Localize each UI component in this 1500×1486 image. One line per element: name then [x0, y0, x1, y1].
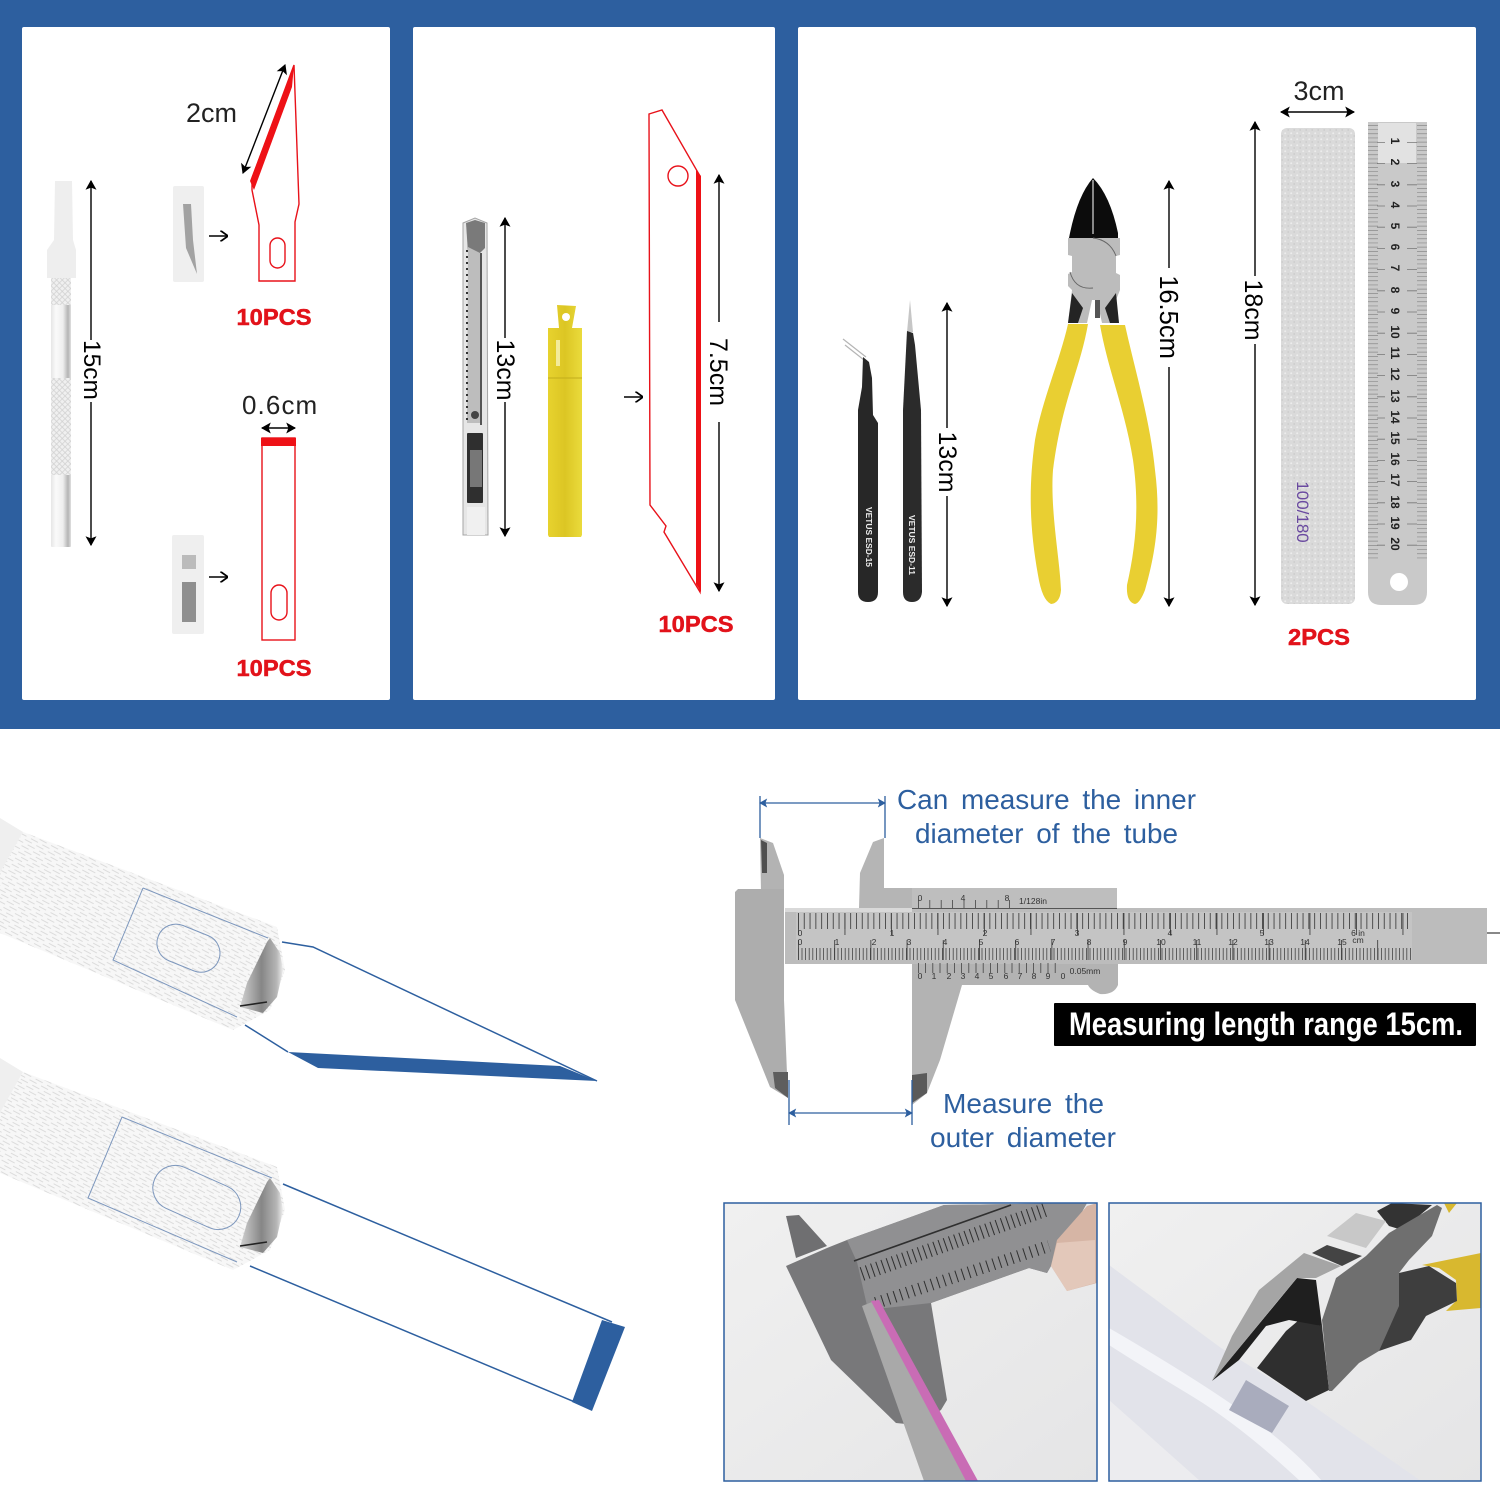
icon: steel ruler: 4 — [1388, 202, 1402, 209]
icon: steel ruler: 20 — [1388, 537, 1402, 551]
icon: straight tweezers: VETUS ESD-11 — [907, 515, 917, 575]
dimension: outer diameter — [789, 1080, 912, 1125]
illustration: vernier caliper: cm — [1352, 935, 1364, 945]
icon: steel ruler: 8 — [1388, 287, 1402, 294]
caption: inner diameter: diameter of the tube — [915, 818, 1178, 849]
illustration: vernier caliper: 0 — [798, 937, 803, 947]
illustration: vernier caliper: 3 — [961, 971, 966, 981]
dimension: 2cm — [186, 65, 285, 173]
icon: steel ruler: 10 — [1388, 325, 1402, 339]
panel: craft knife and blades — [22, 27, 390, 700]
illustration: vernier caliper: 9 — [1046, 971, 1051, 981]
quantity label: 10PCS — [236, 304, 312, 330]
icon: steel ruler: 3 — [1388, 181, 1402, 188]
dimension: 3cm — [1281, 76, 1354, 112]
dimension: 15cm: 15cm — [78, 340, 105, 400]
icon: steel ruler: 5 — [1388, 223, 1402, 230]
dimension: 7.5cm: 7.5cm — [704, 338, 732, 406]
caption: outer diameter: outer diameter — [930, 1122, 1116, 1153]
illustration: vernier caliper: 13 — [1264, 937, 1274, 947]
icon: steel ruler: 17 — [1388, 473, 1402, 487]
photo: pliers cutting tube — [1109, 1203, 1481, 1481]
icon: blade package 1 — [173, 186, 204, 282]
fixed upper jaw — [760, 838, 784, 892]
icon: steel ruler: 13 — [1388, 389, 1402, 403]
icon: steel ruler: 9 — [1388, 308, 1402, 315]
illustration: vernier caliper: 8 — [1005, 893, 1010, 903]
caption: inner diameter: Can measure the inner — [897, 784, 1196, 815]
sliding upper jaw — [859, 838, 1117, 908]
icon: sanding file — [1281, 128, 1355, 604]
illustration: vernier caliper: 6 — [1015, 937, 1020, 947]
illustration: vernier caliper: 5 — [1260, 928, 1265, 938]
icon: steel ruler: 15 — [1388, 431, 1402, 445]
dimension: 13cm: 13cm — [491, 339, 519, 401]
illustration: vernier caliper: 11 — [1193, 937, 1202, 947]
dimension: 2cm: 2cm — [186, 98, 237, 128]
panel: utility knife — [413, 27, 775, 700]
icon: steel ruler: 1 — [1388, 138, 1402, 145]
main beam — [785, 908, 1487, 964]
quantity label: 10PCS — [658, 611, 734, 637]
illustration: vernier caliper: 2 — [983, 928, 988, 938]
quantity label: 10PCS — [236, 655, 312, 681]
dimension: 18cm: 18cm — [1239, 279, 1267, 341]
illustration: vernier caliper: 6 in — [1351, 928, 1365, 938]
illustration: vernier caliper: 3 — [1075, 928, 1080, 938]
icon: steel ruler: 18 — [1388, 495, 1402, 509]
illustration: vernier caliper: 3 — [907, 937, 912, 947]
illustration: vernier caliper: 5 — [979, 937, 984, 947]
illustration: flat blade in knife handle — [0, 1058, 625, 1411]
illustration: vernier caliper — [735, 838, 1500, 1105]
fixed lower jaw — [735, 889, 788, 1098]
illustration: vernier caliper: 0 — [798, 928, 803, 938]
illustration: vernier caliper: 8 — [1087, 937, 1092, 947]
illustration: vernier caliper: 9 — [1123, 937, 1128, 947]
caption: outer diameter: Measure the — [943, 1088, 1104, 1119]
illustration: vernier caliper: 12 — [1228, 937, 1238, 947]
quantity label: 2PCS — [1288, 624, 1350, 650]
illustration: vernier caliper: 0 — [1061, 971, 1066, 981]
arrow — [209, 576, 227, 578]
blade outline: flat — [261, 438, 296, 640]
icon: bent tweezers — [843, 339, 878, 602]
illustration: vernier caliper: 0.05mm — [1070, 966, 1100, 976]
icon: craft knife handle with cap — [47, 181, 76, 547]
icon: sanding file: 100/180 — [1293, 481, 1312, 543]
illustration: vernier caliper: 1 — [835, 937, 840, 947]
illustration: vernier caliper: 4 — [1168, 928, 1173, 938]
icon: utility knife — [463, 218, 488, 535]
icon: steel ruler: 16 — [1388, 452, 1402, 466]
icon: straight tweezers — [903, 300, 922, 602]
icon: steel ruler: 14 — [1388, 410, 1402, 424]
illustration: vernier caliper: 7 — [1018, 971, 1023, 981]
sliding lower jaw — [912, 964, 1118, 1105]
caliper scales — [798, 904, 1412, 968]
illustration: vernier caliper: 5 — [989, 971, 994, 981]
illustration: vernier caliper: 1/128in — [1019, 896, 1047, 906]
illustration: vernier caliper: 4 — [961, 893, 966, 903]
icon: yellow blade pack — [548, 305, 582, 537]
blue header band — [0, 0, 1500, 729]
icon: steel ruler: 19 — [1388, 516, 1402, 530]
illustration: vernier caliper: 2 — [947, 971, 952, 981]
photo: caliper measuring file — [724, 1203, 1097, 1481]
illustration: vernier caliper: 1 — [932, 971, 937, 981]
icon: yellow cutting pliers — [1031, 178, 1158, 604]
dimension: 13cm: 13cm — [933, 431, 961, 493]
illustration: vernier caliper: 6 — [1004, 971, 1009, 981]
icon: steel ruler: 2 — [1388, 159, 1402, 166]
caption: inner diameter — [897, 784, 1196, 849]
blade outline: snap-off — [649, 110, 701, 592]
icon: steel ruler: 11 — [1388, 347, 1402, 360]
dimension: 3cm: 3cm — [1293, 76, 1345, 106]
illustration: vernier caliper: 1 — [890, 928, 895, 938]
illustration: vernier caliper: 4 — [943, 937, 948, 947]
icon: bent tweezers: VETUS ESD-15 — [864, 507, 874, 567]
icon: steel ruler: 6 — [1388, 244, 1402, 251]
illustration: vernier caliper: 2 — [872, 937, 877, 947]
illustration: angled blade in knife handle — [0, 818, 597, 1081]
illustration: vernier caliper: 4 — [975, 971, 980, 981]
caption: outer diameter — [930, 1088, 1116, 1153]
icon: steel ruler: 12 — [1388, 367, 1402, 381]
icon: steel ruler: 7 — [1388, 265, 1402, 272]
dimension: inner diameter — [760, 796, 885, 838]
illustration: vernier caliper: 10 — [1156, 937, 1166, 947]
illustration: vernier caliper: 0 — [918, 971, 923, 981]
arrow — [209, 235, 227, 237]
panel: tweezers, pliers, file and ruler — [798, 27, 1476, 700]
icon: blade package 2 — [172, 535, 204, 634]
illustration: vernier caliper: 8 — [1032, 971, 1037, 981]
icon: steel ruler — [1368, 122, 1427, 605]
illustration: vernier caliper: 7 — [1051, 937, 1056, 947]
illustration: vernier caliper: 14 — [1300, 937, 1310, 947]
dimension: 0.6cm: 0.6cm — [242, 390, 318, 420]
dimension: 16.5cm: 16.5cm — [1154, 275, 1182, 359]
illustration: vernier caliper: 15 — [1337, 937, 1347, 947]
blade outline: angled — [250, 65, 299, 281]
arrow — [624, 396, 642, 398]
illustration: vernier caliper: 0 — [918, 893, 923, 903]
